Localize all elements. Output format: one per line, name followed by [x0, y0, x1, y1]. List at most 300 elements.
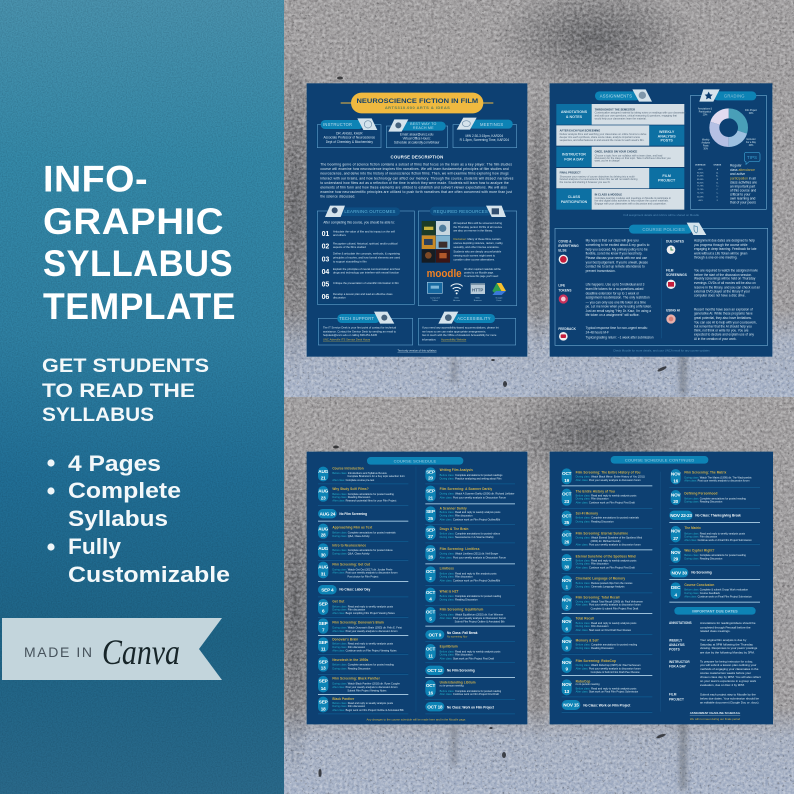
- schedule: Sep 21: 21: [428, 495, 433, 500]
- schedule: Oct 30: [562, 554, 637, 571]
- donut labels: Participation: [699, 111, 712, 114]
- policy: covid: prevent transmission.: [586, 269, 616, 273]
- schedule: Sep 7: 7: [322, 628, 325, 633]
- schedule: Sep 7: SEP: [319, 621, 328, 626]
- icon: web browser: [471, 283, 485, 302]
- schedule: Oct 23: [562, 489, 637, 506]
- schedule: Sep 20: Before class: Complete annotations for posted readings: [440, 473, 503, 477]
- policy: life tokens: life token on a assignment" will suffice.: [586, 313, 640, 317]
- schedule: Dec 4: Before class: Complete & submit Group Work evaluation: [684, 587, 749, 591]
- page 3: course schedule: [307, 452, 527, 724]
- grade scale table: 90-92%: [697, 172, 704, 174]
- schedule: Sep 13: Before class: Complete annotations for posted reading: [332, 663, 394, 667]
- assignment row: film project: FINAL PROJECT: [560, 170, 581, 174]
- donut labels: Posts: [703, 145, 709, 148]
- panel: required resources: posted to our Moodle page.: [464, 271, 494, 274]
- ribbon: made in Canva: MADE IN: [24, 644, 92, 660]
- schedule: Sep 27: Before class: Complete annotations for posted videos: [440, 531, 501, 535]
- outcome 01: and others: [333, 233, 346, 237]
- assignment row: weekly analysis posts: Deliver analysis films and watching your classmates on online forums to delve: [560, 133, 647, 136]
- outcome 03: [322, 252, 401, 264]
- schedule: Oct 5: OCT: [426, 610, 435, 615]
- schedule: Aug 31: [318, 562, 397, 578]
- schedule: Oct 30: Before class: Read and reply to weekly analysis posts: [576, 559, 637, 563]
- tips text: critical to your: [730, 192, 751, 196]
- grade scale table: <60%: [698, 199, 703, 202]
- icon: web browser: Web: [475, 297, 481, 299]
- schedule: Nov 9: NOV: [562, 660, 573, 665]
- schedule: Nov 2: NOV: [562, 598, 573, 603]
- schedule: Oct 23: OCT: [562, 492, 572, 497]
- schedule: Nov 1: NOV: [562, 578, 573, 583]
- outcome 06: Develop a lesson plan and lead an effective class: [333, 292, 393, 296]
- schedule: Aug 24: AUG 24: [320, 511, 336, 516]
- schedule: Sep 6: SEP: [319, 602, 328, 607]
- schedule: Sep 4: No Class: Labor Day: [339, 588, 370, 592]
- policy: due dates: DUE DATES: [666, 240, 684, 244]
- policy: due dates: engaging in deep learning. Feedback for late: [694, 247, 757, 251]
- schedule: Sep 14: Submit Film Project Viewing Notes: [347, 688, 387, 692]
- schedule: Oct 2: Limitless: [440, 567, 454, 571]
- schedule: Sep 25: SEP: [426, 509, 435, 514]
- schedule: Oct 25: [562, 511, 640, 526]
- schedule: Sep 27: SEP: [426, 528, 435, 533]
- schedule: Oct 5: [425, 607, 506, 624]
- schedule: Aug 24: [318, 509, 367, 518]
- grade scale table: 80-82%: [697, 182, 704, 184]
- panel: instructor: Associate Professor of Neuroscience: [323, 136, 375, 140]
- schedule: Aug 21: [318, 467, 405, 482]
- due date: instructor for a day: you will submit a lesson plan outlining your: [700, 663, 756, 667]
- due date: weekly analysis posts: [669, 638, 758, 654]
- schedule: Nov 30: [670, 568, 712, 577]
- policy: life tokens: assignment resubmission. The only restriction: [586, 296, 650, 300]
- text-only link: Text-only version of this syllabus: [398, 348, 437, 352]
- schedule: Oct 9: OCT 9: [428, 632, 442, 637]
- schedule: Oct 4: 4: [429, 596, 432, 601]
- policy: using AI: AI in the creation of your work.: [694, 337, 737, 341]
- page 1: course overview: [307, 83, 527, 357]
- schedule: Nov 6: During class: Film discussion: [576, 624, 609, 628]
- schedule: Sep 4: SEP 4: [321, 587, 334, 592]
- schedule: Nov 8: NOV: [562, 639, 573, 644]
- due date: film project: Submit each project step to Moodle by the: [700, 693, 756, 697]
- schedule: Nov 20: NOV: [671, 493, 681, 498]
- schedule: Oct 16: [425, 680, 502, 697]
- course schedule heading: COURSE SCHEDULE: [394, 458, 437, 463]
- schedule: Sep 25: After class: Continue work on Film Project Outline/Bib: [440, 517, 501, 521]
- policy: film screenings: external DVD player at the library if your: [694, 289, 750, 293]
- due date: film project: below due dates. Your submission should be: [700, 697, 759, 701]
- tips text: [730, 164, 757, 204]
- due date: annotations: related class meetings.: [700, 629, 731, 633]
- schedule: Sep 21: Film Screening: A Scanner Darkly: [440, 487, 492, 491]
- assignment row: instructor for a day: ONCE, BASED ON YOUR CHOICE: [595, 150, 637, 154]
- schedule: Nov 6: Total Recall: [576, 617, 594, 621]
- schedule: Sep 21: SEP: [426, 488, 435, 493]
- schedule: Oct 16: Before class: Complete annotations for posted reading: [440, 689, 502, 693]
- policy: covid: contact me to set up remote attendance to: [586, 265, 645, 269]
- policy: life tokens: team life tokens for a no-questions-asked: [586, 287, 644, 291]
- policy: due dates: work without a Life Token will be given: [694, 251, 748, 255]
- schedule: Nov 2: After class: Post your weekly analysis to discussion forum: [576, 603, 641, 607]
- tips text: class activities are: [730, 180, 757, 184]
- schedule: Oct 25: Sci-Fi Memory: [576, 511, 598, 515]
- schedule: Oct 26: [562, 530, 643, 546]
- schedule: Nov 9: 9: [565, 667, 568, 672]
- panel: required resources: REQUIRED RESOURCES: [433, 209, 488, 214]
- schedule: Nov 30: NOV 30: [671, 570, 687, 575]
- assignment row: instructor for a day: [556, 147, 684, 167]
- schedule: Nov 22-23: NOV 22-23: [670, 513, 692, 518]
- policy: covid: flexible, so let me know if you need help.: [586, 252, 642, 256]
- outcome 02: aspects of the films studied: [333, 245, 366, 249]
- continued schedule heading: [611, 456, 708, 464]
- schedule: Sep 13: Neurotech in the 1950s: [332, 658, 369, 662]
- panel: best way to reach me: REACH ME: [413, 126, 434, 130]
- schedule: Sep 6: After class: Begin compiling Film Project Viewing Notes: [332, 611, 395, 615]
- donut labels: [698, 108, 757, 151]
- due date: instructor for a day: course material two weeks before your: [700, 671, 751, 675]
- schedule: Oct 5: Film Screening: Equilibrium: [440, 608, 484, 612]
- icon: computer: [427, 282, 442, 302]
- schedule: Nov 1: [562, 575, 633, 591]
- schedule: Sep 28: Film Screening: Limitless: [440, 547, 480, 551]
- policy: using AI: generative AI. While these programs have: [694, 312, 753, 316]
- donut labels: For a Day: [746, 141, 757, 144]
- course description: COURSE DESCRIPTION: [391, 154, 443, 159]
- schedule: Oct 4: OCT: [426, 590, 435, 595]
- schedule: Oct 26: (2004) dir. Michael Gondry: [591, 539, 621, 543]
- title: Infographic Syllabus Template: SYLLABUS: [43, 243, 233, 284]
- schedule: Aug 23: Before class: Complete annotations for posted reading: [332, 492, 394, 496]
- grade scale table: D: [717, 196, 719, 198]
- schedule: Sep 7: Film Screening: Donovan's Brain: [332, 621, 384, 625]
- panel: required resources: All other required materials will be: [464, 268, 501, 271]
- panel: meetings: MEETINGS: [480, 122, 503, 127]
- assignment row: instructor for a day: want, you're in charge!: [595, 160, 620, 163]
- title: Infographic Syllabus Template: INFO-: [43, 158, 148, 200]
- schedule: Oct 5: After class: Post your weekly analysis to Discussion Forum: [440, 616, 506, 620]
- schedule: Aug 31: Film Screening: Get Out: [332, 563, 371, 567]
- icon: wifi: Access: [453, 299, 460, 302]
- schedule: Nov 6: NOV: [562, 619, 573, 624]
- grade scale table: 73-76%: [697, 189, 704, 191]
- due date: instructor for a day: [669, 659, 761, 687]
- grade scale table: B+: [716, 176, 718, 178]
- schedule: Sep 25: 25: [428, 516, 433, 521]
- policy: feedback: 24-48 hours M-F: [586, 330, 609, 334]
- grade scale table: B-: [716, 182, 719, 184]
- panel: best way to reach me: Email: akaur@uncc.edu: [400, 132, 434, 136]
- policy: using AI: You can use AI to help with your coursework,: [694, 320, 757, 324]
- schedule: Sep 18: SEP: [319, 699, 328, 704]
- schedule: Sep 28: SEP: [426, 548, 435, 553]
- subtitle: get students to read the syllabus: GET STUDENTS: [42, 355, 209, 377]
- assignment row: film project: FILM: [662, 174, 671, 178]
- course schedule heading: [367, 457, 463, 465]
- schedule: Sep 25: [425, 506, 501, 522]
- schedule: Aug 31: During class: Watch Get Out (2017) dir. Jordan Peele: [332, 567, 393, 571]
- schedule: Nov 6: After class: Start work on First Draft Peer Review: [576, 628, 631, 632]
- policy: using AI: great potential, they also have limitations.: [694, 316, 752, 320]
- assignment row: annotations and notes: [556, 104, 687, 125]
- grade scale table: GRADE: [713, 164, 722, 167]
- panel: tech support: helpdesk@uncc.edu or calling 828-251-6445: [323, 333, 377, 337]
- schedule: Nov 16: NOV: [671, 472, 681, 477]
- schedule: Nov 13: Before class: Read and reply to weekly analysis posts: [576, 686, 637, 690]
- schedule: Nov 8: 8: [565, 646, 568, 651]
- schedule: Nov 6: Before class: Read and reply to weekly analysis posts: [576, 621, 637, 625]
- icon: wifi: Web: [454, 297, 460, 299]
- schedule: Aug 30: [318, 543, 393, 558]
- schedule: Nov 2: Film Screening: Total Recall: [576, 595, 620, 599]
- icon: web browser: HTTP: [472, 288, 483, 293]
- outcome 05: [322, 281, 400, 288]
- schedule: Sep 27: Drugs & The Brain: [440, 527, 469, 531]
- schedule: Sep 6: [318, 599, 395, 615]
- schedule: Oct 30: After class: Continue work on Film Project First Draft: [576, 566, 635, 570]
- schedule: Sep 27: During class: Neuroscience in A Scanner Darkly: [440, 535, 494, 539]
- schedule: Oct 11: 11: [428, 654, 433, 659]
- schedule: Sep 11: SEP: [319, 640, 328, 645]
- schedule: Oct 11: During class: Film discussion: [440, 653, 473, 657]
- schedule: Aug 23: After class: Research potential films for your Film Project: [332, 499, 397, 503]
- schedule: Nov 16: [671, 469, 752, 484]
- due date: annotations: completed through Perusall before the: [700, 625, 751, 629]
- due date: instructor for a day: FOR A DAY: [669, 665, 687, 669]
- schedule: Nov 8: Memory & Self: [576, 638, 599, 642]
- grade scale table: 77-79%: [697, 186, 704, 188]
- moodle update note: Check Moodle for more details, and your UNCA email for any course updates: [613, 349, 710, 353]
- schedule: Oct 2: [425, 566, 501, 583]
- schedule: Nov 27: After class: Continue work on Final Film Project Submission: [684, 538, 752, 542]
- panel: best way to reach me: Virtual Office Hours:: [403, 136, 431, 140]
- schedule: Aug 30: Intro to Neuroscience: [332, 544, 366, 548]
- policy: film screenings: evenings. DVDs of all movies will be also on: [694, 281, 756, 285]
- panel: learning outcomes: [317, 206, 414, 304]
- schedule: Nov 20: Before class: Complete annotations for posted reading: [684, 496, 746, 500]
- assignment row: class participation: [556, 189, 684, 210]
- panel: required resources: the Thursday period. DVDs of all movies: [453, 225, 503, 229]
- schedule: Nov 13: After class: Start work on Final Film Project Submission: [576, 690, 639, 694]
- schedule: Dec 4: DEC: [671, 585, 681, 590]
- course description: [320, 154, 514, 199]
- schedule: Oct 4: What is HZT: [440, 589, 459, 593]
- schedule: Oct 18: OCT 18: [427, 704, 443, 709]
- policy: covid: EVERYTHING: [558, 244, 579, 248]
- schedule: Oct 16: OCT: [426, 683, 435, 688]
- schedule: Oct 2: After class: Continue work on Film Project Outline/Bib: [440, 579, 501, 583]
- schedule: Sep 14: Film Screening: Black Panther: [332, 677, 381, 681]
- schedule: Oct 2: During class: Film discussion: [440, 575, 473, 579]
- schedule: Nov 29: [671, 547, 746, 563]
- donut labels: 30%: [703, 149, 708, 151]
- policy: covid: Please discuss your needs with me and use: [586, 256, 647, 260]
- assignment row: weekly analysis posts: sequences, and what features in and around the movie for each week's film.: [560, 139, 645, 142]
- icon: computer: Computer/: [430, 296, 440, 299]
- schedule: Oct 11: OCT: [426, 647, 435, 652]
- schedule: Nov 27: Before class: Read and reply to weekly analysis posts: [684, 531, 746, 535]
- assignment row: annotations and notes: and add your own questions, critical reasoning & questions, engaging that: [595, 115, 677, 118]
- schedule: Oct 19: OCT: [562, 471, 572, 476]
- feature bullet list: Fully: [68, 534, 122, 559]
- outcome 05: 05: [322, 281, 329, 288]
- policy: film screenings: FILM: [666, 269, 674, 273]
- due date: film project: FILM: [669, 693, 677, 697]
- schedule: Sep 25: A Scanner Darkly: [440, 506, 467, 510]
- tips text: and active: [730, 172, 745, 176]
- schedule: Nov 15: No Class: Work on Film Project: [583, 703, 631, 707]
- grade scale table: A: [717, 168, 719, 171]
- policy: life tokens: [558, 283, 652, 317]
- schedule: Aug 30: AUG: [318, 546, 329, 551]
- policy: film screenings: Weekly screenings will be held on Thursday: [694, 277, 756, 281]
- schedule: Sep 25: Before class: Read and reply to weekly analysis posts: [440, 510, 501, 514]
- panel: course policies: COURSE POLICIES: [642, 227, 685, 232]
- course description: neuroscience, and delve into the history of neuroscience fiction films. Then, we will examine films exploring how drugs: [320, 172, 509, 176]
- page 1 title banner: [341, 93, 493, 113]
- panel: meetings: MW 2:30-3:15pm, KAR204: [465, 134, 503, 138]
- schedule: Aug 31: Post choice for Film Project: [347, 574, 379, 578]
- panel: required resources: viewing such scenes might want to: [453, 253, 496, 257]
- schedule: Sep 28: After class: Post your weekly analysis to Discussion Forum: [440, 555, 506, 559]
- grade scale table: 60-69%: [697, 196, 704, 198]
- tips text: class attendance: [730, 168, 755, 172]
- assignment row: film project: faceted analysis of a neuroscience fiction film we will not watch during: [560, 178, 638, 181]
- schedule: Nov 27: During class: Film discussion: [684, 534, 718, 538]
- schedule: Oct 12: OCT 12: [427, 668, 443, 673]
- panel: required resources: Disclaimer: Many of these films contain: [453, 237, 501, 241]
- schedule: Sep 20: During class: Practice analyzing and writing about Film: [440, 476, 501, 480]
- course description: The booming genre of science fiction contains a subset of films that focus on the brain as a key player. The film studies: [320, 162, 512, 166]
- outcome 04: Explain the principles of neural communication and how: [333, 267, 400, 271]
- schedule: Nov 29: Before class: Complete annotations for posted reading: [684, 553, 746, 557]
- feature bullet list: Customizable: [68, 562, 230, 587]
- schedule: Oct 26: During class: Watch Eternal Sunshine of the Spotless Mind: [576, 536, 643, 540]
- schedule: Nov 13: no in-person meeting: [576, 682, 600, 686]
- policy: covid: help you succeed. My primary policy is to be: [586, 247, 648, 251]
- ribbon: made in Canva: Canva: [102, 632, 180, 672]
- schedule: Nov 9: [562, 657, 641, 674]
- schedule: Oct 23: After class: Continue work on Film Project First Draft: [576, 500, 635, 504]
- important due dates heading: IMPORTANT DUE DATES: [692, 609, 738, 613]
- panel: required resources: sexuality, and other intense scenarios.: [453, 245, 500, 249]
- assignment row: weekly analysis posts: [556, 125, 684, 146]
- due date: weekly analysis posts: Saturday at 9PM following the Thursday: [700, 642, 753, 646]
- course description: examine how neuroscientific principles are utilized to push forth narratives that are often concerned with more than just: [320, 190, 512, 194]
- panel: tech support: UNC Asheville ITS Service Desk Hours: [323, 337, 371, 341]
- panel: required resources: are also on reserve in the library.: [453, 229, 493, 233]
- panel: tech support: [318, 312, 413, 345]
- schedule: Sep 20: Writing Film Analysis: [440, 468, 473, 472]
- schedule: Sep 6: Get Out: [332, 599, 345, 603]
- assignment row: class participation: CLASS: [568, 195, 581, 199]
- schedule: Nov 6: [562, 616, 637, 633]
- schedule: Oct 11: [425, 644, 501, 661]
- schedule: Sep 13: [318, 657, 394, 672]
- outcome 06: discussion: [333, 295, 346, 299]
- policy: film screenings: computer does not have a disc drive.: [694, 293, 746, 297]
- schedule: Sep 20: [425, 467, 503, 482]
- assignment row: weekly analysis posts: WEEKLY: [659, 130, 675, 134]
- schedule: Sep 11: [318, 637, 397, 653]
- panel: required resources: scenes depicting violence, racism, nudity,: [453, 241, 503, 245]
- icon: google drive: [492, 283, 506, 302]
- due date: weekly analysis posts: Your original film analysis is due by: [700, 638, 747, 642]
- schedule: Nov 29: 29: [673, 557, 679, 562]
- schedule: Sep 18: 18: [321, 706, 326, 711]
- due date: instructor for a day: INSTRUCTOR: [669, 660, 690, 664]
- schedule: Oct 5: 5: [429, 617, 432, 622]
- policy: due dates: [666, 239, 757, 260]
- schedule: Sep 13: 13: [321, 666, 326, 671]
- schedule: Nov 27: [671, 526, 752, 542]
- subtitle: get students to read the syllabus: TO READ THE: [42, 380, 195, 402]
- feature bullet list: 4 Pages: [68, 451, 161, 476]
- tips text: of this course and: [730, 188, 756, 192]
- schedule: Nov 29: NOV: [671, 550, 681, 555]
- schedule: Nov 27: NOV: [671, 529, 681, 534]
- outcome 02: Recognize cultural, historical, spiritual, and/or political: [333, 242, 398, 246]
- schedule: Sep 25: During class: Film discussion: [440, 513, 473, 517]
- schedule: Aug 23: AUG: [318, 489, 329, 494]
- schedule: Sep 14: 14: [321, 686, 326, 691]
- outcome 03: to support storytelling in film: [333, 260, 367, 264]
- panel: required resources: To access this page you'll need:: [464, 275, 499, 278]
- panel: tech support: The IT Service Desk is your first point of contact for technical: [323, 325, 396, 329]
- due date: weekly analysis posts: ANALYSIS: [669, 643, 685, 647]
- schedule: Oct 4: Before class: Complete annotations for posted reading: [440, 594, 502, 598]
- panel: learning outcomes: LEARNING OUTCOMES: [344, 209, 396, 214]
- schedule: Oct 23: During class: Film discussion: [576, 496, 609, 500]
- schedule: Aug 28: AUG: [318, 526, 329, 531]
- panel: instructor: [317, 118, 381, 148]
- schedule: Oct 30: 30: [564, 564, 570, 569]
- outcome 03: Define & articulate the concepts, methods, & organizing: [333, 252, 400, 256]
- schedule: Nov 16: After class: Post your weekly analysis to discussion forum: [684, 479, 749, 483]
- assignment row: weekly analysis posts: ANALYSIS: [658, 134, 676, 138]
- schedule: Oct 18: [425, 702, 495, 711]
- icon: star: [705, 92, 713, 99]
- schedule: Sep 14: After class: Post your weekly analysis to discussion forum: [332, 685, 397, 689]
- schedule: Nov 30: No Screening: [691, 571, 712, 575]
- grade scale table: C-: [716, 193, 719, 195]
- schedule: Sep 6: Before class: Read and reply to weekly analysis posts: [332, 604, 394, 608]
- policy: feedback: Typical grading return: ~1 week after submission: [586, 335, 654, 339]
- schedule: Nov 20: Defining Personhood: [684, 492, 718, 496]
- schedule: Oct 12: [425, 666, 475, 675]
- schedule: Sep 28: [425, 545, 506, 561]
- schedule: Nov 16: 16: [673, 478, 679, 483]
- schedule: Aug 24: No Film Screening: [339, 512, 367, 516]
- assignment row: instructor for a day: FOR A DAY: [564, 158, 584, 162]
- outcome 01: 01: [322, 231, 329, 238]
- film poster collage: [422, 221, 450, 263]
- policy: using AI: Recent months have seen an explosion of: [694, 307, 753, 311]
- panel: instructor: DR. ANGEL KAUR: [336, 131, 363, 135]
- assignment row: instructor for a day: INSTRUCTOR: [562, 153, 586, 157]
- schedule: Oct 19: 19: [564, 478, 570, 483]
- assignment row: instructor for a day: discussion for the class on that topic. Take it whichever direction you: [595, 157, 671, 160]
- panel: meetings: [453, 118, 517, 148]
- assignment details note: Full assignment details and rubrics will be shared on Moodle: [624, 213, 700, 217]
- page 1 title banner: NEUROSCIENCE FICTION IN FILM: [356, 98, 479, 105]
- outcome 01: [322, 230, 395, 238]
- policy: due dates: through a one-on-one meeting.: [694, 256, 737, 260]
- schedule: Aug 30: Before class: Complete annotations for posted videos: [332, 548, 393, 552]
- schedule: Aug 21: After class: Complete course pre-test: [332, 478, 375, 482]
